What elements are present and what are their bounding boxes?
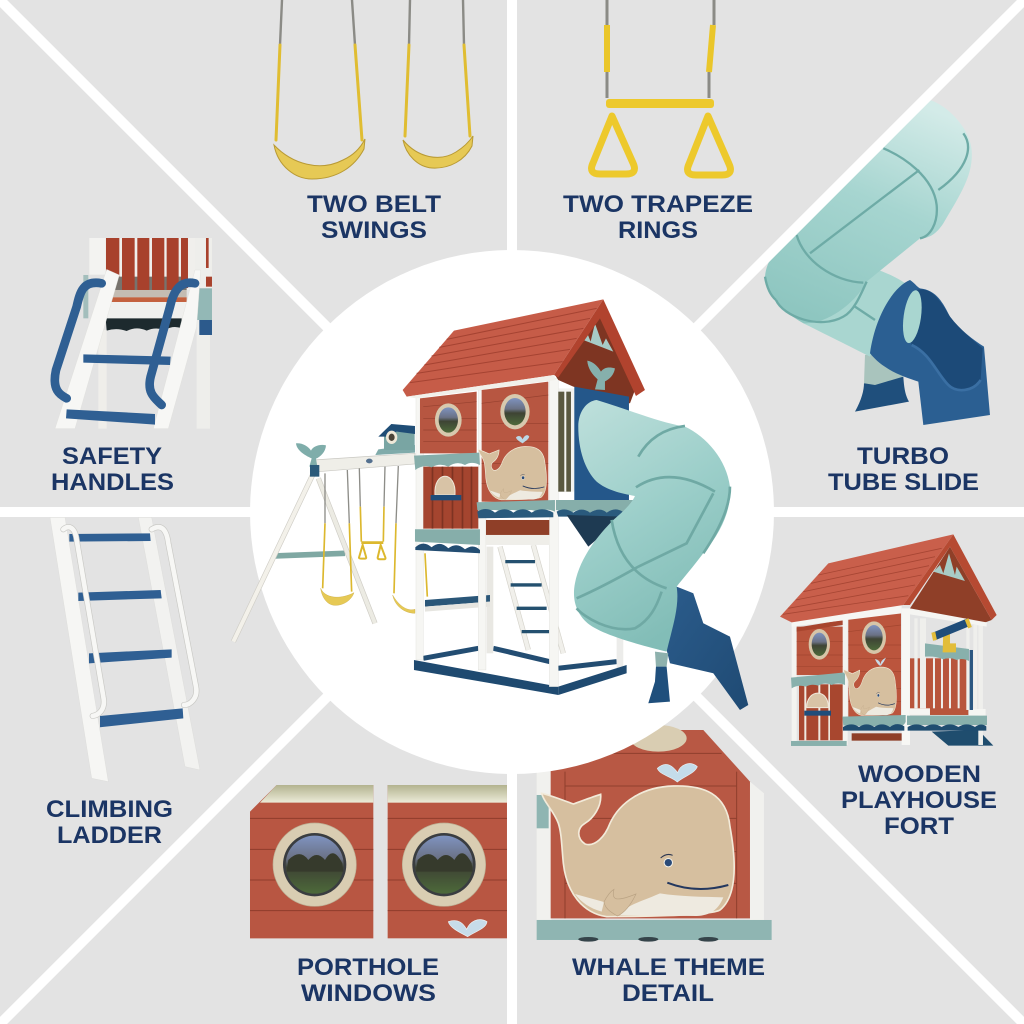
whale — [478, 446, 546, 500]
slide exit — [663, 587, 748, 710]
label: two belt swings: SWINGS — [321, 217, 427, 244]
panel: porthole windows — [250, 785, 507, 1007]
icon: whale panel photo — [537, 725, 772, 942]
window box — [431, 476, 461, 500]
center circle — [250, 250, 774, 774]
panel: two belt swings — [274, 0, 473, 244]
swing frame — [233, 443, 415, 642]
label: two belt swings — [307, 191, 441, 244]
panel: safety handles — [51, 238, 212, 496]
label: two trapeze rings: TWO TRAPEZE — [563, 191, 753, 218]
label: turbo tube slide — [828, 443, 979, 496]
label: whale theme detail: WHALE THEME — [572, 954, 765, 981]
valances — [414, 453, 633, 553]
center illustration: playset — [233, 299, 748, 710]
label: wooden playhouse fort: PLAYHOUSE — [841, 787, 997, 814]
label: wooden playhouse fort: FORT — [884, 813, 954, 840]
birdhouse — [375, 424, 415, 455]
ladder — [500, 545, 563, 653]
label: climbing ladder — [46, 796, 173, 849]
label: porthole windows — [297, 954, 439, 1007]
icon: climbing ladder — [50, 517, 200, 782]
playhouse walls — [420, 382, 574, 545]
label: climbing ladder: LADDER — [57, 822, 162, 849]
label: two belt swings: TWO BELT — [307, 191, 441, 218]
label: two trapeze rings — [563, 191, 753, 244]
label: wooden playhouse fort: WOODEN — [858, 761, 981, 788]
blue slide entry panel — [574, 387, 629, 500]
tube slide — [574, 400, 730, 652]
label: safety handles — [51, 443, 174, 496]
spout — [516, 435, 529, 443]
panel: wooden playhouse fort — [780, 534, 997, 840]
icon: porthole photos — [250, 785, 507, 938]
swing chains and seats — [321, 466, 427, 613]
slide support — [648, 652, 670, 703]
panel: two trapeze rings — [563, 0, 753, 244]
panel: turbo tube slide — [765, 100, 990, 496]
portholes — [435, 394, 530, 437]
label: turbo tube slide: TUBE SLIDE — [828, 469, 979, 496]
icon: belt swings — [274, 0, 473, 179]
label: safety handles: HANDLES — [51, 469, 174, 496]
panel: climbing ladder — [46, 517, 200, 849]
tower base frame — [414, 547, 627, 695]
label: two trapeze rings: RINGS — [618, 217, 698, 244]
tower posts — [416, 378, 558, 687]
icon: tube slide — [765, 100, 990, 425]
icon: playhouse fort — [780, 534, 997, 746]
gable and roof — [403, 299, 645, 403]
shadow under slide — [567, 515, 623, 547]
label: whale theme detail — [572, 954, 765, 1007]
icon: safety handles — [55, 238, 212, 429]
label: climbing ladder: CLIMBING — [46, 796, 173, 823]
label: safety handles: SAFETY — [62, 443, 162, 470]
label: porthole windows: PORTHOLE — [297, 954, 439, 981]
label: wooden playhouse fort — [841, 761, 997, 840]
panel: whale theme detail — [537, 725, 772, 1007]
icon: trapeze rings — [592, 0, 730, 175]
label: porthole windows: WINDOWS — [301, 980, 436, 1007]
label: whale theme detail: DETAIL — [622, 980, 714, 1007]
label: turbo tube slide: TURBO — [857, 443, 949, 470]
